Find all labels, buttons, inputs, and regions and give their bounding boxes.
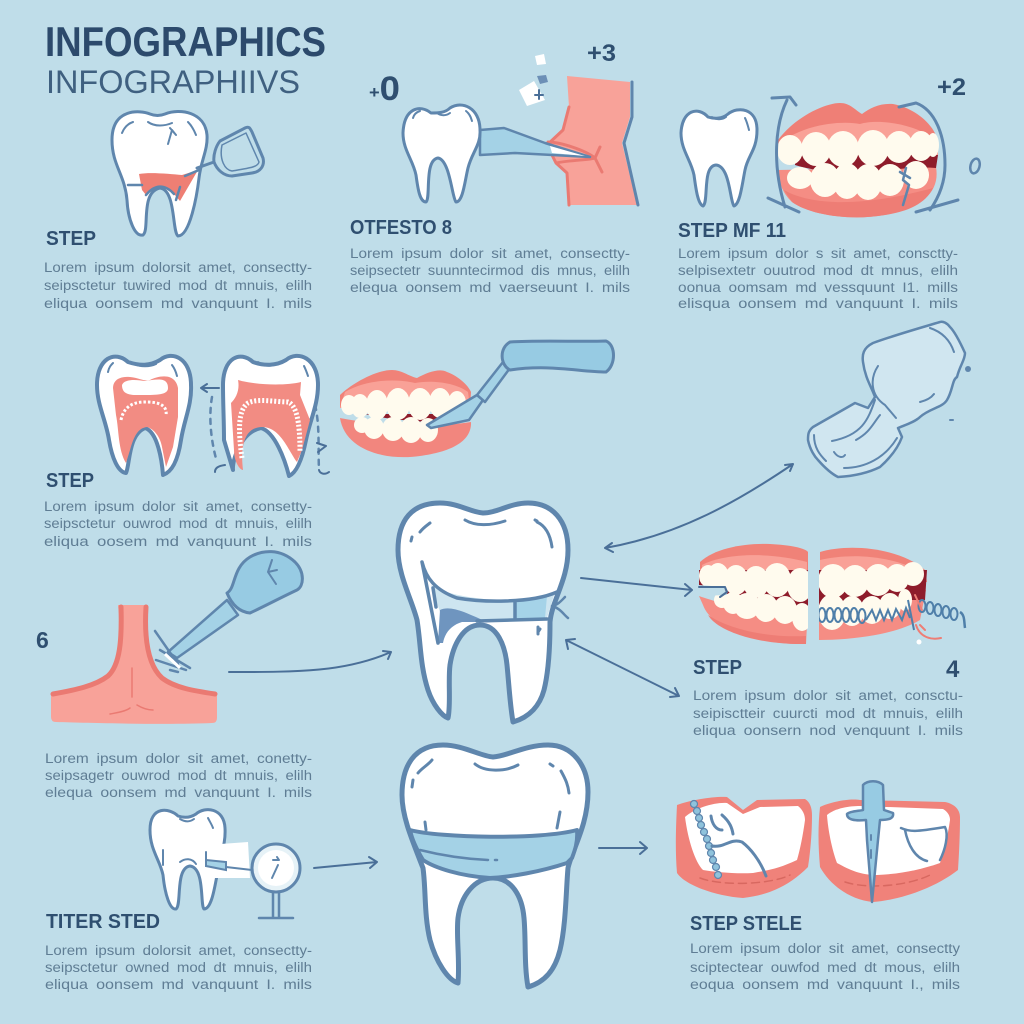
arrow: gum to tooth <box>229 651 391 672</box>
text block: step 8 <box>690 941 960 992</box>
text block: step 7: eliqua oonsem md vanquunt I. mils <box>45 977 312 992</box>
text block: step 7 <box>45 943 312 992</box>
icon: split mouth with wire <box>699 540 965 650</box>
wire beads <box>690 800 722 878</box>
number: +0: 0 <box>380 70 400 108</box>
icon: mouth with scaler tool <box>340 341 614 457</box>
number: 6: 6 <box>36 627 49 653</box>
text block: step 2: Lorem ipsum dolor sit amet, consectty- <box>350 246 630 261</box>
text block: step 2: elequa oonsem md vaerseuunt I. mils <box>350 280 630 295</box>
number: +0: + <box>369 83 380 102</box>
text block: step 3: oonua oomsam md vessquunt I1. mills <box>678 280 958 295</box>
number: 4: 4 <box>946 656 960 683</box>
text block: step 5: seipsagetr ouwrod mod dt mnuis, elilh <box>45 768 312 783</box>
icon: tooth with gauge <box>150 810 300 918</box>
number: +2: +2 <box>937 74 966 101</box>
arrow: to shell <box>605 464 793 552</box>
title: INFOGRAPHIIVS <box>46 64 300 100</box>
text block: step 5: elequa oonsem md vanquunt I. mils <box>45 785 312 800</box>
text block: step 6 <box>693 688 963 738</box>
icon: shell shape outline <box>808 322 971 477</box>
text block: step 4 <box>44 499 312 549</box>
title <box>45 18 326 100</box>
heading: step 7: TITER STED <box>46 911 160 933</box>
icon: tooth with probe into gum <box>403 54 638 205</box>
heading: step 1: STEP <box>46 228 96 250</box>
heading: step 8: STEP STELE <box>690 913 802 935</box>
heading: step 2: OTFESTO 8 <box>350 217 452 239</box>
icon: large tooth with band <box>398 503 568 722</box>
text block: step 7: Lorem ipsum dolorsit amet, consectty- <box>45 943 312 958</box>
icon: gum cross-section with syringe <box>51 552 302 724</box>
text block: step 5 <box>45 751 312 800</box>
text block: step 6: Lorem ipsum dolor sit amet, consctu- <box>693 688 963 703</box>
heading: step 3: STEP MF 11 <box>678 220 786 242</box>
icon: tooth <box>681 110 757 206</box>
text block: step 6: seipisctteir cuurcti mod dt mnuis, elilh <box>693 706 963 721</box>
arrow: double headed to step <box>566 639 679 697</box>
icon: open mouth with teeth <box>768 97 981 217</box>
title: INFOGRAPHICS <box>45 18 326 65</box>
text block: step 3: Lorem ipsum dolor s sit amet, consctty- <box>678 246 958 261</box>
arrow: gauge to tooth <box>314 857 377 868</box>
text block: step 2 <box>350 246 630 295</box>
text block: step 3: selpisextetr ouutrod mod dt mnus, elilh <box>678 263 958 278</box>
text block: step 8: eoqua oonsem md vanquunt I., mils <box>690 977 960 992</box>
icon: large tooth with blue band <box>402 745 588 987</box>
text block: step 4: eliqua oosem md vanquunt I. mils <box>44 534 312 549</box>
text block: step 2: seipsectetr suunntecirmod dis mnus, elilh <box>350 263 630 278</box>
number: +3: +3 <box>587 40 616 67</box>
wire spring <box>818 600 965 630</box>
text block: step 1: seipsctetur tuwired mod dt mnuis, elilh <box>44 278 312 293</box>
text block: step 3 <box>678 246 958 311</box>
icon: tooth with exposed canals <box>201 356 329 476</box>
text block: step 7: seipsctetur owned mod dt mnuis, elilh <box>45 960 312 975</box>
text block: step 4: seipsctetur ouwrod mod dt mnuis, elilh <box>44 516 312 531</box>
arrow: tooth to gums <box>599 842 647 854</box>
text block: step 1: Lorem ipsum dolorsit amet, consectty- <box>44 260 312 275</box>
text block: step 8: Lorem ipsum dolor sit amet, consectty <box>690 941 960 956</box>
text block: step 3: elisqua oonsem md vanquunt I. mils <box>678 296 958 311</box>
arrow: tooth to right mouth <box>581 578 692 596</box>
icon: tooth with inner pulp <box>97 356 191 475</box>
text block: step 6: eliqua oonsern nod venquunt I. mils <box>693 723 963 738</box>
text block: step 5: Lorem ipsum dolor sit amet, conetty- <box>45 751 312 766</box>
icon: tooth with loop tool <box>112 112 263 236</box>
text block: step 4: Lorem ipsum dolor sit amet, consetty- <box>44 499 312 514</box>
text block: step 1: eliqua oonsem md vanquunt I. mils <box>44 296 312 311</box>
heading: step 6: STEP <box>693 657 742 679</box>
text block: step 1 <box>44 260 312 311</box>
icon: gum cross-sections with wire and probe <box>676 781 960 902</box>
text block: step 8: sciptectear ouwfod med dt mous, elilh <box>690 960 960 975</box>
heading: step 4: STEP <box>46 470 94 492</box>
